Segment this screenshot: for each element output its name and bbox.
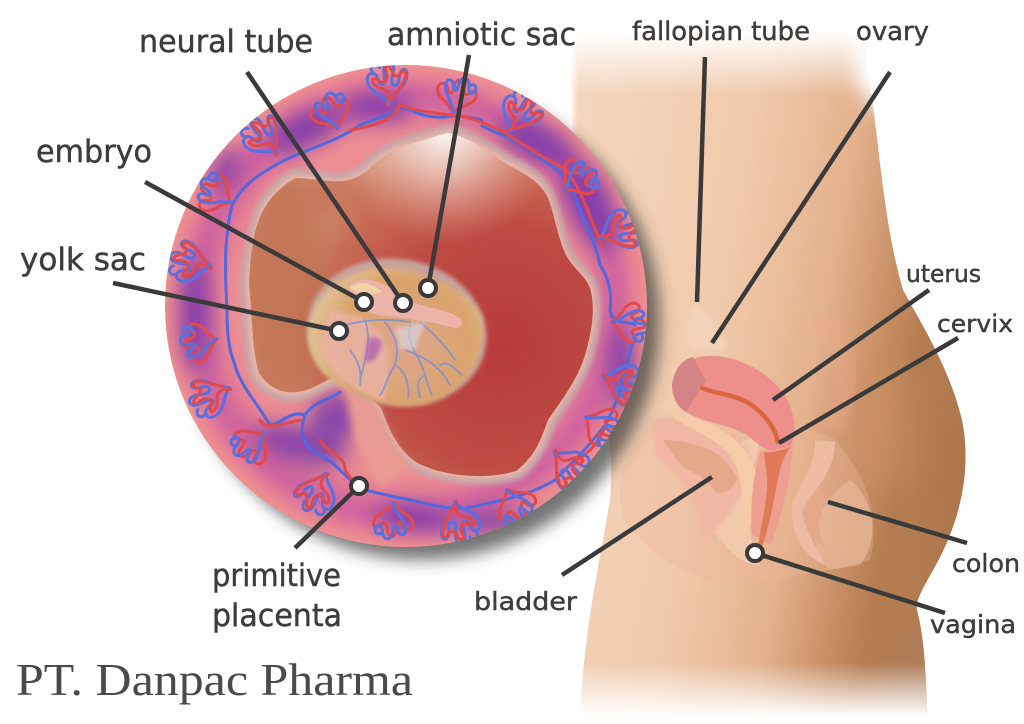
brand name: PT. Danpac Pharma [16,655,413,705]
yolk sac shading [320,310,389,400]
label: vagina: vagina [930,610,1016,639]
colon [792,440,835,565]
fallopian tube and ovary [685,304,725,352]
placental vessel sprigs [166,61,649,548]
grain texture [160,60,655,555]
bladder [652,416,752,545]
amniotic cavity [249,133,593,476]
yolk stalk vessels [345,320,462,398]
gestational sac with embryo [296,244,498,420]
label: bladder: bladder [474,587,578,616]
body silhouette [571,37,966,714]
purple ring patches [181,94,635,536]
label: fallopian tube: fallopian tube [632,17,810,47]
label: neural tube: neural tube [139,24,313,60]
pale ring rim [243,127,598,482]
lower placenta bridge [345,385,410,488]
pelvic organs [620,304,874,582]
leader lines [113,55,967,613]
cervical canal [758,447,791,545]
uterus tube end shade [672,357,706,412]
uterine canal [702,388,778,442]
left lobe of cavity [249,133,535,392]
label: embryo: embryo [36,134,152,170]
uterus [672,356,794,451]
vagina wall [751,446,793,545]
bright top highlight [356,133,535,236]
label: primitive placenta: primitive [212,558,341,594]
label: colon: colon [952,549,1020,578]
label: primitive placenta: placenta [212,598,342,634]
magenta band [198,98,614,514]
embryo magnified circle [165,65,647,547]
label: ovary: ovary [856,17,929,47]
pelvic floor outline [620,418,874,582]
label: cervix: cervix [937,310,1013,338]
main vessels around the ring [226,105,635,508]
label: yolk sac: yolk sac [20,242,146,278]
label: uterus: uterus [906,260,981,288]
leader end dots [331,280,763,561]
circle drop shadow [184,84,660,560]
embryo body [349,280,462,328]
sheath around uterus [670,414,757,540]
label: amniotic sac: amniotic sac [387,17,576,53]
